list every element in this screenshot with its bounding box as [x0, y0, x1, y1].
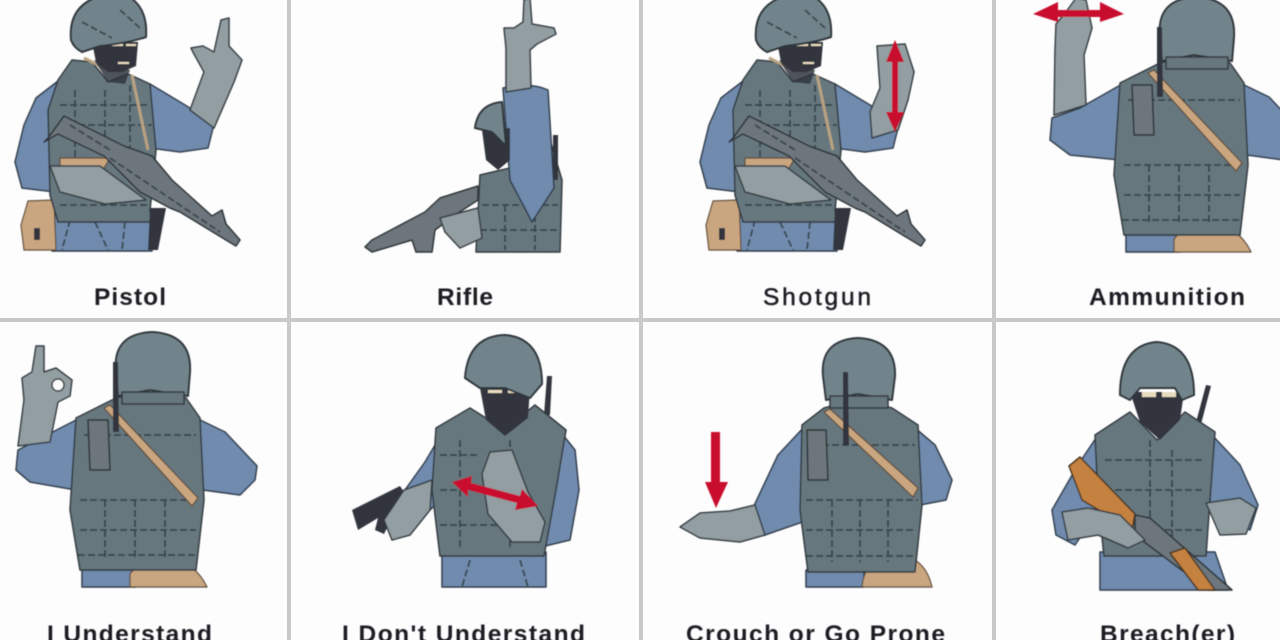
right glove [1206, 498, 1256, 535]
soldier body with rifle [700, 0, 925, 251]
soldier from behind [70, 332, 257, 587]
soldier from behind [1114, 0, 1280, 252]
panel: Ammunition [1033, 0, 1280, 311]
antenna [553, 135, 558, 180]
red double arrow horizontal [1033, 2, 1124, 22]
shotgun body [1135, 515, 1232, 590]
rifle [365, 186, 478, 252]
panel: I Understand [16, 332, 257, 640]
panel: Rifle [365, 0, 562, 311]
panel: Crouch or Go Prone [680, 338, 952, 640]
blue arms [1052, 435, 1105, 545]
soldier body with rifle [15, 0, 240, 251]
soldier torso [476, 140, 562, 252]
antenna [544, 376, 552, 415]
red double arrow diagonal [452, 476, 538, 510]
orange stock [1069, 457, 1135, 530]
pants [1100, 552, 1228, 590]
supporting glove [440, 208, 482, 248]
orange fore-end [1170, 548, 1215, 590]
helmet and masked face [1130, 392, 1184, 440]
vest [1095, 412, 1215, 556]
forearm glove [870, 44, 914, 138]
raised glove [1054, 0, 1092, 115]
raised glove [504, 0, 556, 92]
label: Rifle: Rifle [437, 284, 493, 311]
raised blue arm [503, 85, 554, 222]
extended glove [680, 505, 765, 542]
glove holding pistol [384, 480, 432, 540]
blue arm [16, 418, 80, 490]
left glove [1062, 508, 1145, 548]
red down arrow [705, 432, 728, 508]
blue arms [405, 420, 450, 525]
panel: I Don't Understand [342, 335, 585, 640]
blue arm [1050, 83, 1124, 160]
vest [432, 405, 566, 556]
OK-sign glove [18, 346, 72, 446]
raised glove pointing up [190, 18, 242, 128]
antenna [1195, 385, 1211, 428]
soldier from behind [800, 338, 952, 587]
open glove over chest [482, 450, 545, 542]
pants [442, 552, 546, 587]
panel: Breach(er) [1052, 342, 1258, 640]
panel: Pistol [15, 0, 242, 311]
label: Shotgun: Shotgun [763, 284, 871, 311]
helmet and face [482, 128, 510, 170]
vest details [480, 205, 558, 250]
pistol [352, 486, 408, 534]
panel: Shotgun [700, 0, 925, 311]
label: Pistol: Pistol [94, 284, 166, 311]
label: Ammunition: Ammunition [1089, 284, 1245, 311]
blue arm [752, 425, 808, 535]
helmet and masked face [480, 388, 530, 436]
red double arrow vertical [886, 40, 904, 132]
